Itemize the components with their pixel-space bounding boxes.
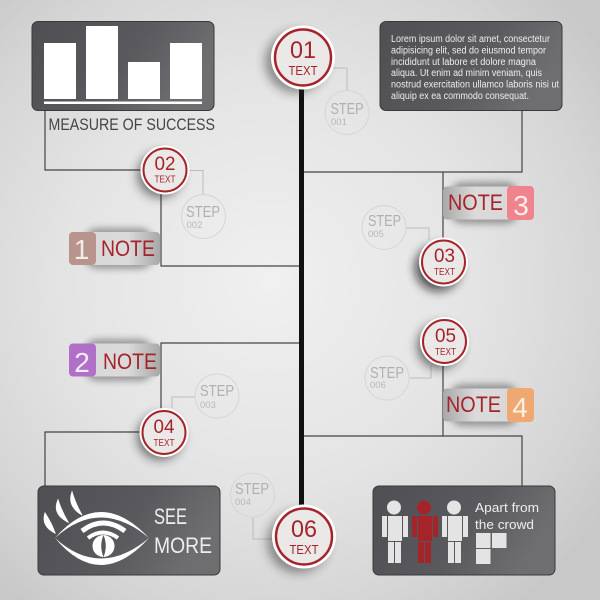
apart from the crowd label — [475, 500, 539, 532]
circle 01: TEXT — [288, 64, 318, 78]
see more label: MORE — [154, 533, 212, 558]
circle 02: TEXT — [154, 174, 176, 186]
circle 06: 06 — [291, 516, 317, 543]
panel: measure of success chart — [32, 22, 214, 110]
step 006: 006 — [370, 380, 386, 391]
heading: measure of success: MEASURE OF SUCCESS — [48, 116, 215, 134]
step 003: STEP — [200, 383, 234, 400]
step 003 — [172, 374, 239, 418]
step 005 — [362, 206, 429, 250]
apart from the crowd label: Apart from — [475, 500, 539, 515]
text block: adipisicing elit, sed do eiusmod tempor — [391, 45, 547, 56]
step 005: STEP — [368, 213, 401, 230]
circle 03 — [415, 238, 468, 291]
note 4: 4 — [512, 392, 528, 423]
text block: Lorem ipsum dolor sit amet, consectetur — [391, 34, 551, 45]
icon: person right — [442, 500, 468, 563]
note 2 — [69, 339, 160, 381]
circle 02: 02 — [154, 154, 176, 175]
step 003: 003 — [200, 400, 216, 411]
circle 06: TEXT — [290, 543, 319, 557]
text block: aliquip ex ea commodo consequat. — [391, 91, 529, 102]
note 1 — [69, 228, 160, 269]
step 002 — [182, 170, 226, 238]
note 2: 2 — [74, 347, 90, 378]
text block: aliqua. Ut enim ad minim veniam, quis — [391, 68, 542, 79]
panel: lorem text — [380, 22, 562, 110]
circle 04: TEXT — [154, 438, 174, 449]
step 004: STEP — [235, 481, 269, 498]
icon: person red — [412, 500, 438, 563]
see more label — [154, 504, 212, 558]
circle 01: 01 — [290, 37, 316, 64]
step 002: STEP — [186, 204, 220, 221]
text block — [391, 34, 559, 102]
circle 04: 04 — [154, 417, 175, 438]
note 4 — [443, 384, 534, 426]
step 001: 001 — [331, 117, 347, 128]
step 004 — [230, 473, 275, 539]
circle 05: TEXT — [435, 347, 456, 358]
step 004: 004 — [235, 497, 251, 508]
note 3 — [443, 182, 534, 224]
note 2: NOTE — [103, 349, 157, 374]
central timeline bar — [299, 60, 304, 530]
step 001: STEP — [330, 101, 364, 118]
circle 01 — [265, 26, 335, 93]
text block: nostrud exercitation ullamco laboris nisi ut — [391, 80, 559, 91]
note 3: NOTE — [448, 190, 503, 215]
note 1: 1 — [74, 234, 89, 265]
step 006: STEP — [370, 365, 404, 382]
circle 05: 05 — [435, 326, 456, 347]
circle 03: 03 — [434, 246, 455, 267]
step 001 — [325, 68, 369, 134]
step 005: 005 — [368, 229, 384, 240]
circle 05 — [417, 317, 469, 369]
bar chart — [44, 26, 202, 104]
note 1: NOTE — [101, 236, 155, 261]
circle 04 — [137, 408, 188, 460]
note 4: NOTE — [446, 392, 501, 417]
circle 06 — [267, 504, 336, 573]
icon: eye — [44, 492, 149, 565]
step 006 — [365, 356, 431, 400]
apart from the crowd label: the crowd — [475, 517, 534, 532]
icon: squares — [476, 533, 506, 564]
circle 02 — [137, 146, 190, 198]
circle 03: TEXT — [434, 267, 455, 278]
note 3: 3 — [513, 190, 529, 221]
see more label: SEE — [154, 504, 187, 529]
panel: see more — [38, 486, 220, 575]
panel: apart from the crowd — [373, 486, 555, 575]
step 002: 002 — [186, 220, 202, 231]
connector lines — [45, 110, 522, 486]
icon: person left — [382, 500, 408, 563]
text block: incididunt ut labore et dolore magna — [391, 57, 536, 68]
